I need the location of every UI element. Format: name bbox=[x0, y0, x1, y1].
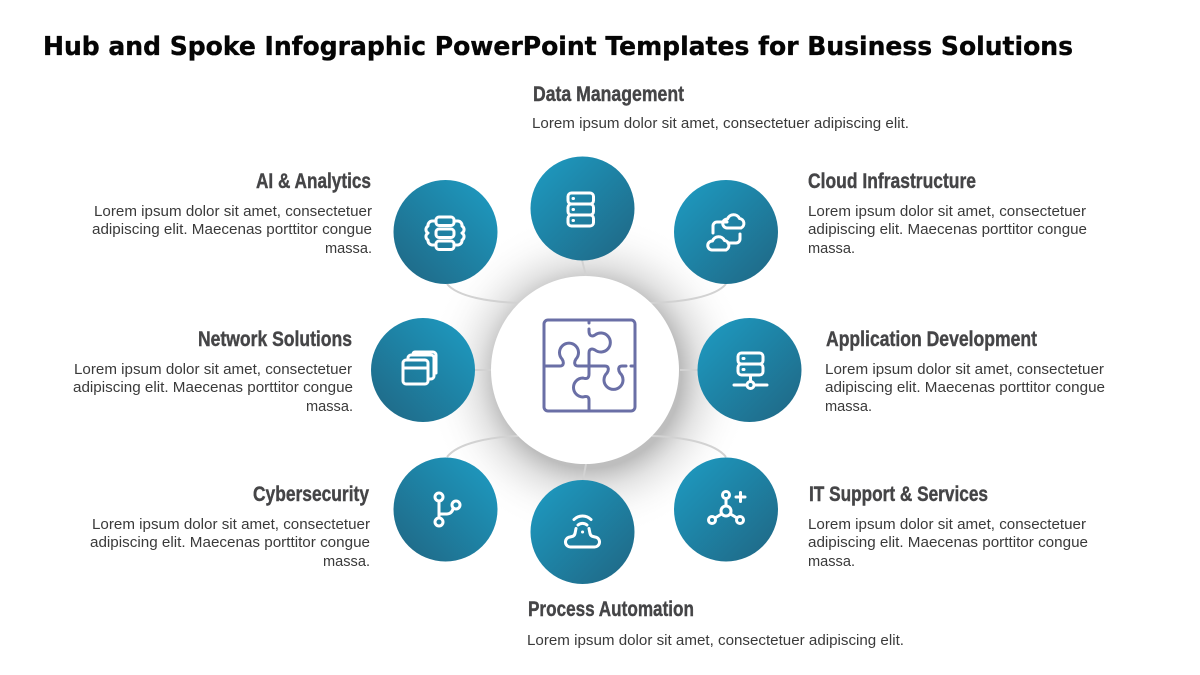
label: it support and services: Lorem ipsum dolor sit amet, consectetuer bbox=[808, 516, 1086, 533]
label: it support and services bbox=[808, 483, 1088, 570]
label: ai and analytics: AI & Analytics bbox=[256, 170, 371, 193]
label: it support and services: adipiscing elit. Maecenas porttitor congue bbox=[808, 534, 1088, 551]
central hub bbox=[491, 276, 679, 464]
label: cloud infrastructure: adipiscing elit. Maecenas porttitor congue bbox=[808, 221, 1087, 238]
spoke connectors bbox=[447, 260, 726, 480]
node: application development bbox=[698, 318, 802, 422]
label: cybersecurity bbox=[90, 483, 370, 570]
label: data management: Data Management bbox=[533, 83, 684, 106]
label: process automation: Lorem ipsum dolor sit amet, consectetuer adipiscing elit. bbox=[527, 632, 904, 649]
node: it support and services bbox=[674, 458, 778, 562]
label: process automation: Process Automation bbox=[528, 598, 694, 621]
label: network solutions: adipiscing elit. Maecenas porttitor congue bbox=[73, 379, 353, 396]
label: cybersecurity: Cybersecurity bbox=[253, 483, 369, 506]
label: data management: Lorem ipsum dolor sit amet, consectetuer adipiscing elit. bbox=[532, 115, 909, 132]
node: ai and analytics bbox=[394, 180, 498, 284]
label: application development: massa. bbox=[825, 398, 872, 415]
hub shadow bbox=[424, 211, 754, 541]
icon: linked clouds bbox=[708, 215, 744, 250]
icon: database stack bbox=[568, 193, 594, 226]
label: cloud infrastructure: Cloud Infrastructure bbox=[808, 170, 976, 193]
icon: network server bbox=[734, 353, 767, 388]
label: application development: Lorem ipsum dolor sit amet, consectetuer bbox=[825, 361, 1104, 378]
title: Hub and Spoke Infographic PowerPoint Templates for Business Solutions bbox=[43, 32, 1073, 62]
label: it support and services: IT Support & Services bbox=[809, 483, 988, 506]
label: network solutions: Network Solutions bbox=[198, 328, 352, 351]
node: cloud infrastructure bbox=[674, 180, 778, 284]
label: ai and analytics: adipiscing elit. Maecenas porttitor congue bbox=[92, 221, 372, 238]
label: application development bbox=[825, 328, 1105, 415]
label: ai and analytics: massa. bbox=[325, 240, 372, 257]
node: cybersecurity bbox=[394, 458, 498, 562]
node: data management bbox=[530, 156, 634, 260]
label: cloud infrastructure: massa. bbox=[808, 240, 855, 257]
label: application development: adipiscing elit. Maecenas porttitor congue bbox=[825, 379, 1105, 396]
label: cybersecurity: Lorem ipsum dolor sit amet, consectetuer bbox=[92, 516, 370, 533]
icon: puzzle bbox=[544, 320, 635, 411]
label: network solutions: massa. bbox=[306, 398, 353, 415]
label: network solutions bbox=[73, 328, 353, 415]
label: ai and analytics: Lorem ipsum dolor sit amet, consectetuer bbox=[94, 203, 372, 220]
label: cybersecurity: adipiscing elit. Maecenas porttitor congue bbox=[90, 534, 370, 551]
label: cloud infrastructure: Lorem ipsum dolor sit amet, consectetuer bbox=[808, 203, 1086, 220]
icon: wireless cloud bbox=[565, 516, 600, 547]
label: cloud infrastructure bbox=[808, 170, 1087, 257]
icon: nodes with plus bbox=[708, 492, 745, 524]
icon: stacked windows bbox=[403, 352, 436, 384]
label: application development: Application Development bbox=[826, 328, 1037, 351]
label: ai and analytics bbox=[92, 170, 372, 257]
label: network solutions: Lorem ipsum dolor sit amet, consectetuer bbox=[74, 361, 352, 378]
icon: branch bbox=[435, 493, 460, 526]
label: data management bbox=[532, 83, 909, 132]
label: process automation bbox=[527, 598, 904, 649]
icon: server cluster bbox=[426, 217, 464, 250]
node: process automation bbox=[530, 480, 634, 584]
node: network solutions bbox=[371, 318, 475, 422]
label: it support and services: massa. bbox=[808, 553, 855, 570]
label: cybersecurity: massa. bbox=[323, 553, 370, 570]
